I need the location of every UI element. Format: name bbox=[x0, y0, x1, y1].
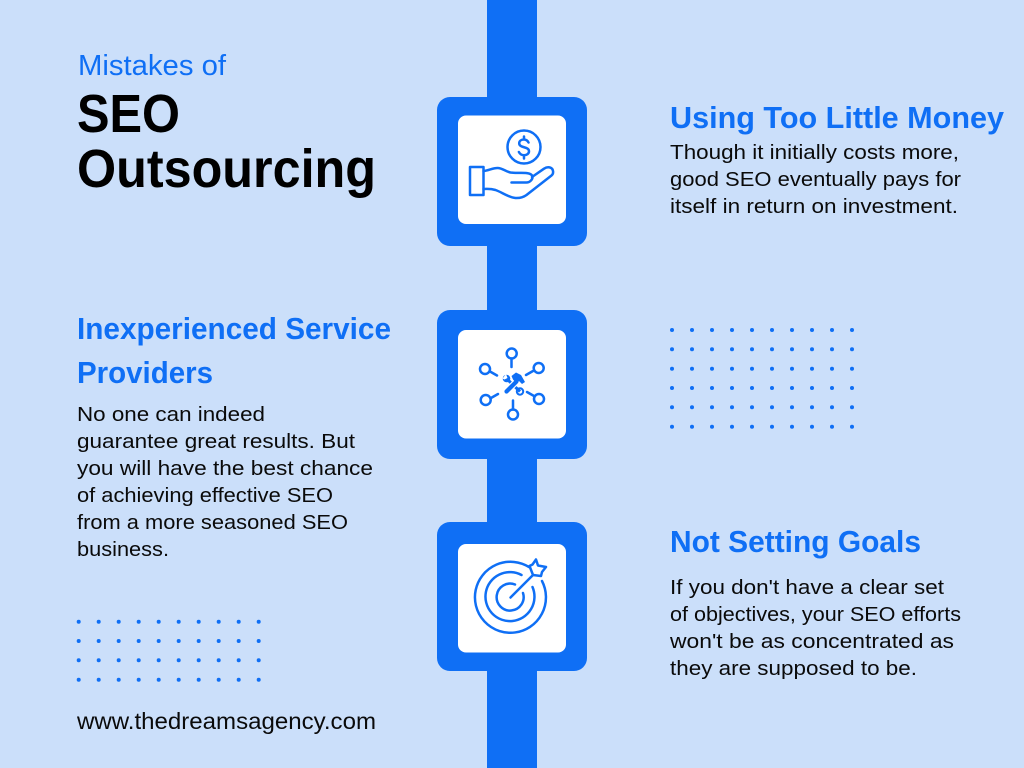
icon tile: target bbox=[437, 522, 587, 671]
heading: inexperienced service providers: Inexperienced Service bbox=[77, 311, 391, 346]
heading: inexperienced service providers bbox=[77, 311, 391, 390]
heading: inexperienced service providers: Providers bbox=[77, 355, 213, 390]
website url: www.thedreamsagency.com bbox=[76, 708, 376, 734]
text block: goals description bbox=[669, 576, 961, 680]
icon: target with arrow bbox=[475, 560, 546, 633]
icon: coin over open hand bbox=[470, 130, 553, 198]
text block: providers description: of achieving effective SEO bbox=[77, 484, 333, 507]
icon: hammer and wrench hub bbox=[480, 348, 544, 420]
title: Mistakes of bbox=[78, 50, 227, 82]
section: inexperienced service providers bbox=[77, 311, 391, 561]
vertical spine bbox=[487, 0, 537, 768]
dot grid: left bbox=[77, 620, 261, 682]
section: using too little money bbox=[670, 100, 1005, 218]
text block: money description: good SEO eventually pays for bbox=[670, 168, 961, 191]
title bbox=[77, 50, 376, 199]
heading: not setting goals: Not Setting Goals bbox=[670, 524, 921, 559]
text block: money description: Though it initially costs more, bbox=[670, 141, 959, 164]
section: not setting goals bbox=[669, 524, 961, 680]
text block: goals description: If you don't have a clear set bbox=[670, 576, 944, 599]
text block: goals description: won't be as concentrated as bbox=[669, 630, 954, 653]
title: SEO bbox=[77, 84, 180, 144]
icon tile: money in hand bbox=[437, 97, 587, 246]
text block: money description bbox=[670, 141, 961, 218]
text block: providers description: guarantee great results. But bbox=[77, 430, 355, 453]
text block: providers description: you will have the best chance bbox=[77, 457, 373, 480]
text block: goals description: they are supposed to be. bbox=[670, 657, 917, 680]
title: Outsourcing bbox=[77, 139, 376, 199]
text block: providers description: from a more seasoned SEO bbox=[77, 511, 348, 534]
icon tile: tools network bbox=[437, 310, 587, 459]
text block: providers description: No one can indeed bbox=[77, 403, 265, 426]
text block: money description: itself in return on investment. bbox=[670, 195, 958, 218]
heading: using too little money: Using Too Little Money bbox=[670, 100, 1005, 135]
dot grid: right bbox=[670, 328, 854, 429]
text block: goals description: of objectives, your SEO efforts bbox=[670, 603, 961, 626]
text block: providers description bbox=[77, 403, 373, 561]
text block: providers description: business. bbox=[77, 538, 169, 561]
